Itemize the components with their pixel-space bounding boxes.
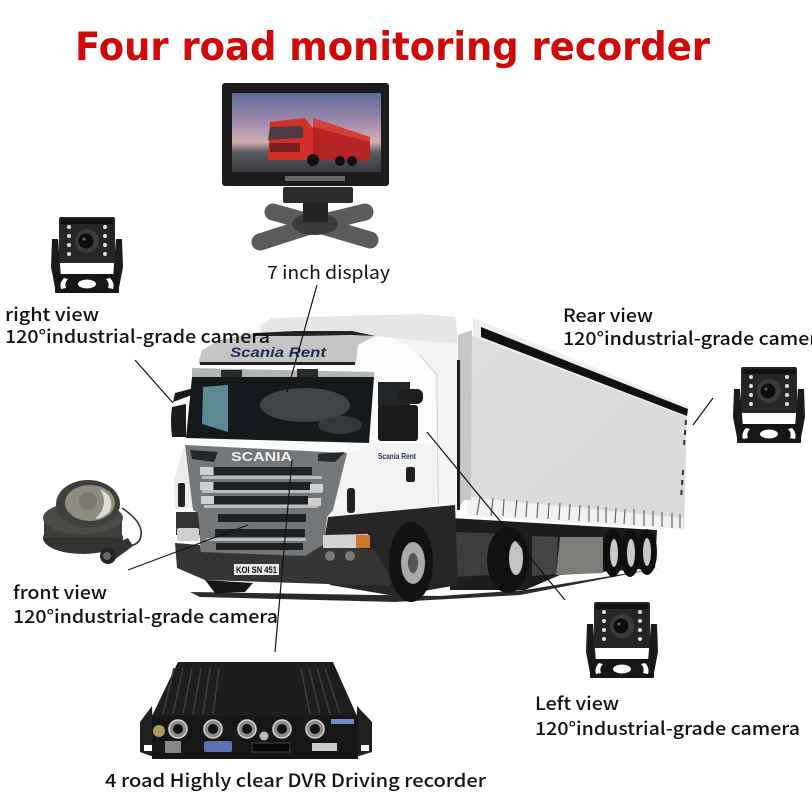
label: 7 inch display: 7 inch display	[267, 259, 391, 285]
windshield	[186, 377, 374, 443]
label: front view	[13, 579, 278, 629]
trailer	[450, 318, 689, 593]
icon: left view camera	[586, 602, 658, 678]
roof spoiler bar	[255, 331, 375, 336]
icon: DVR recorder	[140, 662, 372, 759]
cab back and roof	[258, 315, 459, 520]
label: DVR recorder: 4 road Highly clear DVR Driving recorder	[105, 767, 487, 793]
label: left view: 120°industrial-grade camera	[535, 715, 800, 741]
callout lines	[128, 285, 713, 652]
label: front view: 120°industrial-grade camera	[13, 603, 278, 629]
ground shadow	[190, 568, 660, 602]
icon: 7 inch monitor	[222, 83, 389, 242]
right cab panel	[327, 442, 436, 515]
chassis and bumper	[322, 505, 458, 596]
icon: front dome camera	[43, 480, 141, 564]
left cheek panel	[174, 446, 195, 509]
label: rear view: 120°industrial-grade camera	[563, 325, 812, 351]
truck: SCANIA	[231, 449, 293, 464]
label: right view	[5, 301, 270, 349]
front wheel	[389, 522, 433, 602]
label: right view: 120°industrial-grade camera	[5, 323, 270, 349]
label: left view: Left view	[535, 690, 619, 716]
icon: right view camera	[51, 217, 123, 293]
truck	[171, 314, 689, 602]
truck: Scania Rent	[230, 344, 328, 360]
icon: rear camera	[733, 367, 805, 443]
truck: KOI SN 451	[236, 565, 278, 576]
label: left view	[535, 690, 800, 741]
label: front view: front view	[13, 579, 107, 605]
label: rear view	[563, 302, 812, 351]
roof fairing	[198, 333, 375, 364]
mirrors	[171, 404, 186, 437]
label: rear view: Rear view	[563, 302, 653, 328]
truck: Scania Rent	[378, 452, 416, 461]
grille	[185, 445, 347, 556]
label: right view: right view	[5, 301, 99, 327]
title: Four road monitoring recorder	[75, 25, 711, 70]
